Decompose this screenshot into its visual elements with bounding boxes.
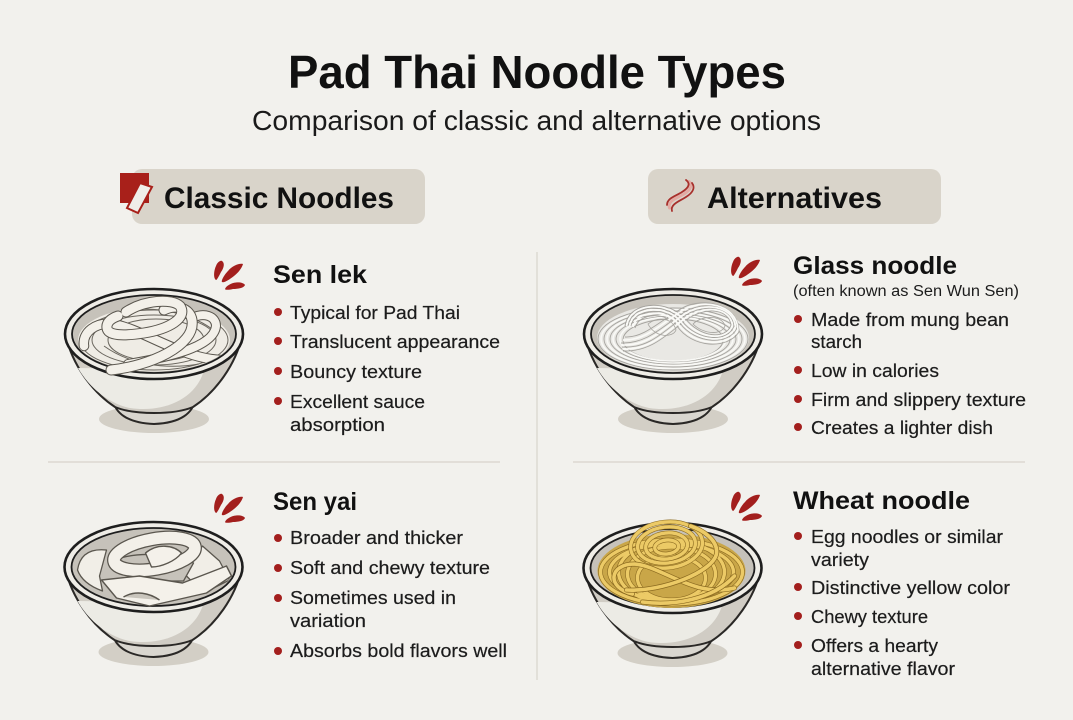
list: Sen lek facts: Typical for Pad Thai [290, 302, 460, 323]
bowl: glass noodles [584, 289, 762, 433]
panel: Wheat noodle [584, 487, 1010, 679]
list: Sen yai facts: Soft and chewy texture [290, 557, 490, 578]
title: Pad Thai Noodle Types [288, 46, 786, 98]
vertical divider [536, 252, 538, 680]
list: Sen lek facts [274, 302, 500, 435]
bowl: wheat noodles [584, 518, 762, 667]
list: Sen lek facts: absorption [290, 414, 385, 435]
list: Sen yai facts: Absorbs bold flavors well [290, 640, 507, 661]
section header: classic noodles: Classic Noodles [164, 182, 394, 215]
icon: red splash [214, 261, 245, 290]
note: other name: (often known as Sen Wun Sen) [793, 283, 1019, 300]
section header: alternatives: Alternatives [707, 182, 882, 215]
list: Wheat noodle facts: Chewy texture [811, 606, 928, 627]
heading: Wheat noodle: Wheat noodle [793, 487, 970, 515]
list: Sen lek facts: Bouncy texture [290, 361, 422, 382]
heading: Sen yai: Sen yai [273, 488, 357, 516]
list: Wheat noodle facts: variety [811, 549, 870, 570]
panel: Sen yai [64, 488, 507, 666]
list: Wheat noodle facts: Offers a hearty [811, 635, 939, 656]
bowl: Sen yai wide noodles [64, 522, 242, 666]
list: Sen yai facts: Sometimes used in [290, 587, 456, 608]
list: Wheat noodle facts [794, 526, 1010, 679]
heading: Glass noodle: Glass noodle [793, 252, 957, 280]
list: Sen yai facts: Broader and thicker [290, 527, 463, 548]
list: Sen yai facts: variation [290, 610, 366, 631]
list: Glass noodle facts: Low in calories [811, 360, 939, 381]
list: Glass noodle facts: starch [811, 331, 862, 352]
icon: red splash [731, 257, 762, 286]
list: Glass noodle facts [794, 309, 1026, 438]
icon: red splash [214, 494, 245, 523]
heading: Sen lek: Sen lek [273, 261, 367, 289]
list: Sen yai facts [274, 527, 507, 661]
list: Sen lek facts: Translucent appearance [290, 331, 500, 352]
list: Glass noodle facts: Creates a lighter dish [811, 417, 993, 438]
list: Wheat noodle facts: Distinctive yellow color [811, 577, 1010, 598]
subtitle: Comparison of classic and alternative options [252, 105, 821, 136]
list: Glass noodle facts: Made from mung bean [811, 309, 1009, 330]
section header: alternatives [648, 169, 941, 224]
list: Sen lek facts: Excellent sauce [290, 391, 425, 412]
panel: Sen lek [65, 261, 500, 435]
list: Wheat noodle facts: Egg noodles or similar [811, 526, 1003, 547]
icon: red splash [731, 492, 762, 521]
list: Wheat noodle facts: alternative flavor [811, 658, 955, 679]
panel: Glass noodle [584, 252, 1026, 438]
list: Glass noodle facts: Firm and slippery texture [811, 389, 1026, 410]
section header: classic noodles [120, 169, 425, 224]
bowl: Sen lek flat noodles [65, 289, 243, 433]
